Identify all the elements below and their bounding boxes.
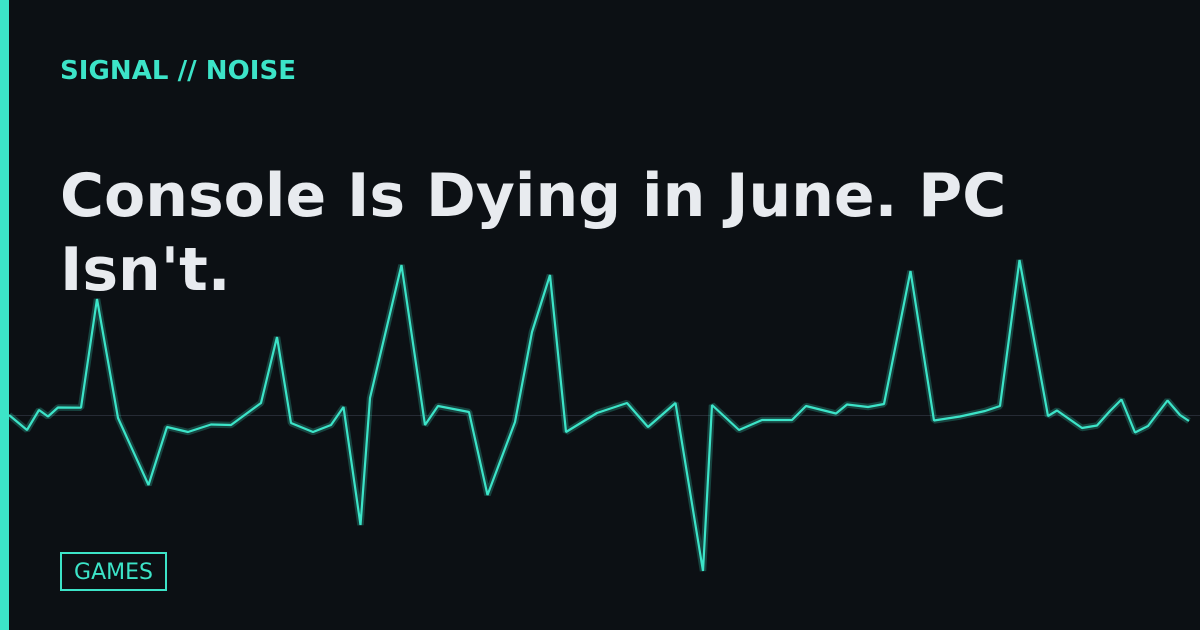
kicker: signal noise: SIGNAL // NOISE [60,56,296,86]
tag: games: GAMES [74,560,153,585]
title: Console Is Dying in June. PC Isn't. [60,161,1006,305]
accent bar [0,0,9,630]
tag: games [60,552,167,591]
